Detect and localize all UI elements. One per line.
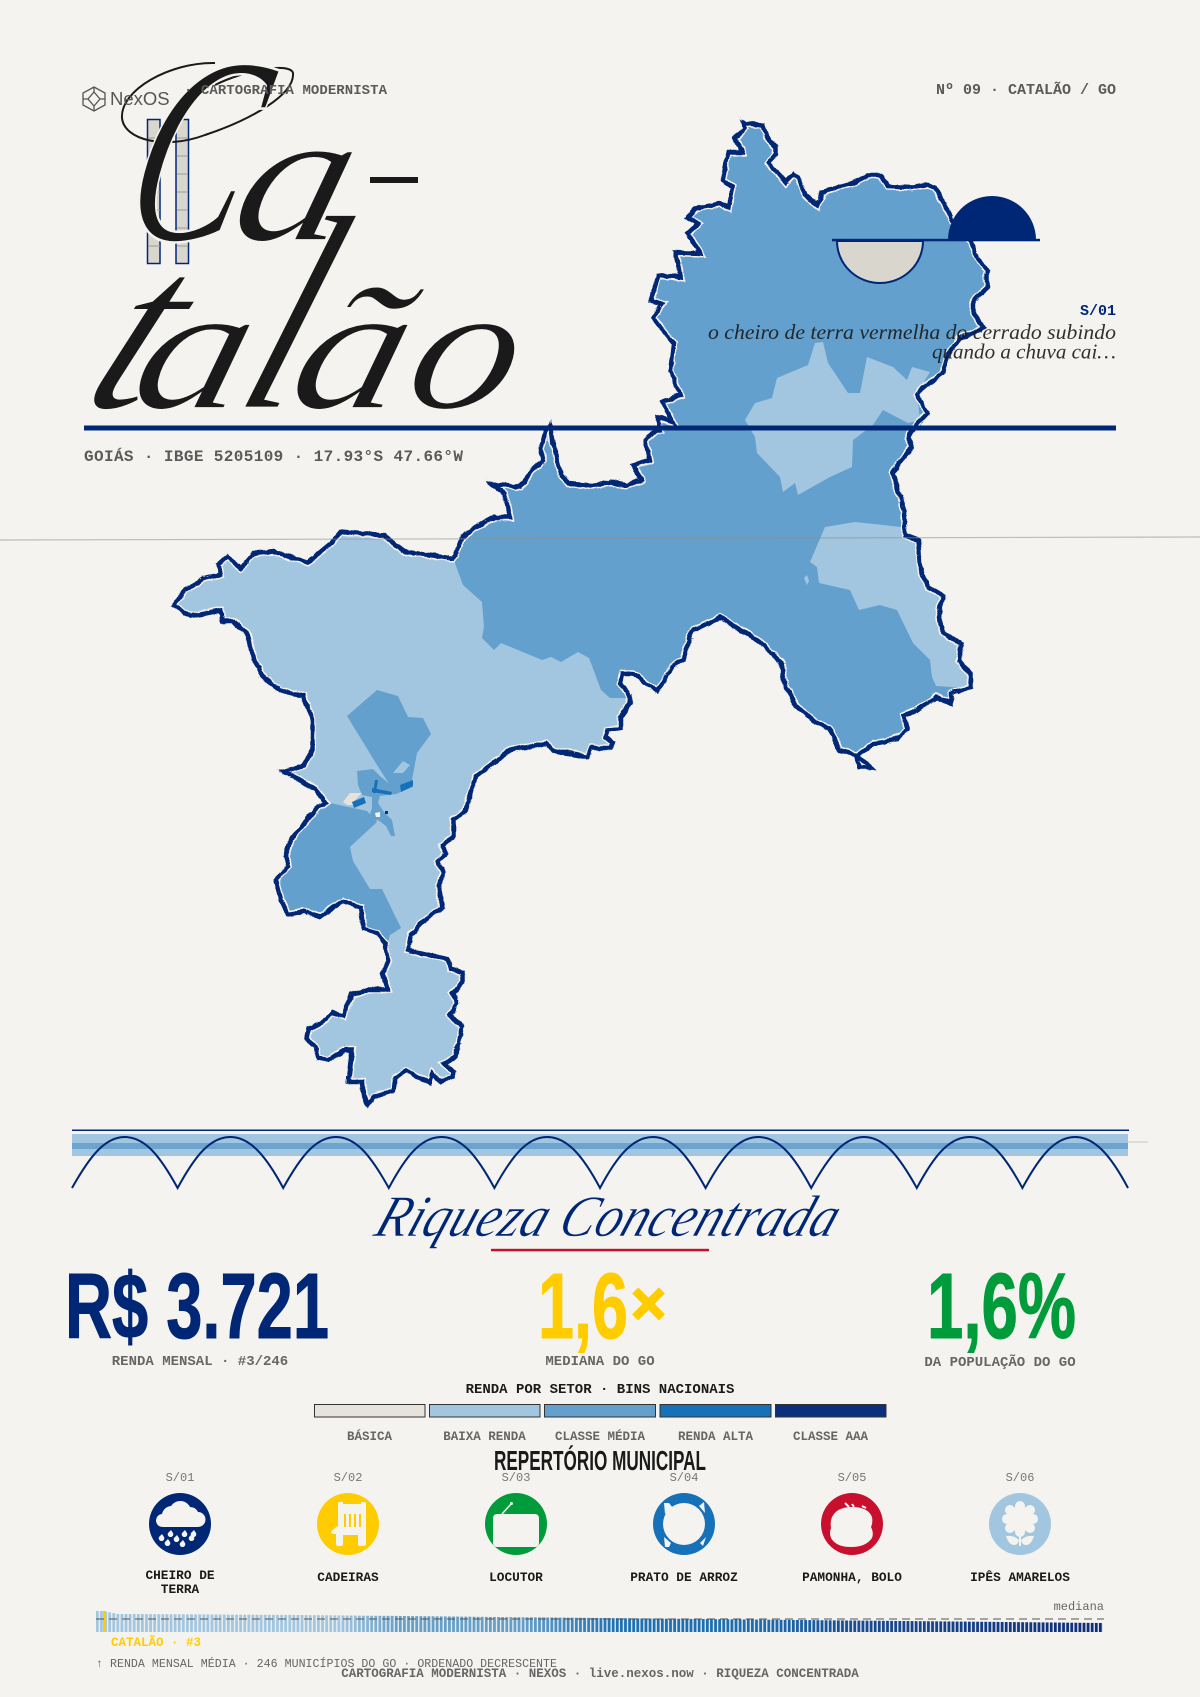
title: Ca-talão: a <box>116 247 279 447</box>
legend: renda por setor: RENDA ALTA <box>678 1430 754 1444</box>
sector: northeast mid income <box>454 127 984 752</box>
median label: mediana <box>1054 1600 1104 1614</box>
item: prato de arroz: S/04 <box>670 1471 698 1485</box>
icon: chair <box>331 1502 366 1546</box>
title: Ca-talão: C <box>101 2 298 298</box>
sense callout: S/01 <box>1080 303 1116 320</box>
location line: GOIÁS · IBGE 5205109 · 17.93°S 47.66°W <box>84 447 463 466</box>
item: cheiro de terra: CHEIRO DE <box>145 1568 215 1583</box>
ranking bar chart: 246 municipalities <box>96 1608 1104 1633</box>
legend: renda por setor: BÁSICA <box>347 1429 392 1444</box>
map of Catalão sectors <box>172 100 1000 1104</box>
item: locutor: LOCUTOR <box>489 1570 543 1585</box>
title: Ca-talão: ã <box>274 247 437 447</box>
sense callout <box>708 303 1116 364</box>
sector: central low income <box>745 342 930 495</box>
title rule <box>84 426 1116 430</box>
urban sector cluster <box>343 769 413 836</box>
stat: mediana: 1,6 <box>538 1254 628 1358</box>
sense callout: o cheiro de terra vermelha do cerrado subindo <box>708 320 1116 344</box>
Catalão rank label: CATALÃO · #3 <box>111 1635 201 1650</box>
chart caption: ↑ RENDA MENSAL MÉDIA · 246 MUNICÍPIOS DO GO · ORDENADO DECRESCENTE <box>96 1657 557 1671</box>
decorative gauge columns behind title <box>148 120 188 264</box>
stat: mediana: MEDIANA DO GO <box>545 1354 655 1370</box>
item: cheiro de terra: S/01 <box>166 1471 194 1485</box>
sector: eastern low income <box>810 522 968 688</box>
legend: renda por setor: BAIXA RENDA <box>443 1430 526 1444</box>
title: Ca-talão: l <box>210 161 382 469</box>
item: pamonha, bolo: S/05 <box>838 1471 866 1485</box>
Catalão marker bar <box>103 1611 106 1632</box>
header issue label: Nº 09 · CATALÃO / GO <box>936 81 1116 99</box>
legend: renda por setor: CLASSE MÉDIA <box>555 1429 646 1444</box>
sector: small spot <box>804 575 809 585</box>
icon: flower <box>1002 1501 1038 1546</box>
sector: north of town <box>347 690 431 790</box>
item: prato de arroz: PRATO DE ARROZ <box>630 1570 738 1585</box>
section heading: Riqueza Concentrada: Riqueza Concentrada <box>366 1184 851 1249</box>
stat: mediana: × <box>631 1270 666 1337</box>
title: Ca-talão: a <box>216 71 382 281</box>
legend: renda por setor: CLASSE AAA <box>793 1430 869 1444</box>
item: cheiro de terra <box>145 1471 215 1597</box>
brand logo: NexOS: NexOS <box>110 88 170 109</box>
title: Ca-talão <box>52 2 548 469</box>
icon: plate <box>663 1502 706 1547</box>
stat: população <box>924 1254 1076 1371</box>
item: locutor: S/03 <box>502 1471 530 1485</box>
title: Ca-talão: t <box>52 200 243 459</box>
item: pamonha, bolo: PAMONHA, BOLO <box>802 1570 902 1585</box>
wave band divider <box>72 1130 1148 1188</box>
item: cadeiras <box>317 1471 379 1585</box>
icon: radio <box>493 1502 539 1547</box>
item: ipês amarelos: S/06 <box>1006 1471 1034 1485</box>
heading: repertório municipal: REPERTÓRIO MUNICIPAL <box>494 1445 706 1476</box>
legend: renda por setor <box>314 1382 886 1444</box>
stat: renda mensal: RENDA MENSAL · #3/246 <box>112 1354 288 1370</box>
icon: cake <box>830 1503 873 1547</box>
item: ipês amarelos <box>970 1471 1070 1585</box>
item: prato de arroz <box>630 1471 738 1585</box>
median line <box>96 1618 1104 1620</box>
title: Ca-talão: o <box>390 248 548 447</box>
item: cadeiras: S/02 <box>334 1471 362 1485</box>
sector: southwest mid income <box>280 803 401 942</box>
sense callout: quando a chuva cai… <box>932 340 1116 364</box>
stat: renda mensal <box>65 1254 329 1370</box>
semicircle emblem <box>832 196 1040 283</box>
item: cadeiras: CADEIRAS <box>317 1570 379 1585</box>
icon: rain cloud <box>156 1501 206 1547</box>
legend: renda por setor: RENDA POR SETOR · BINS NACIONAIS <box>466 1382 734 1398</box>
sector: notch <box>393 761 410 773</box>
brand logo: NexOS <box>83 87 170 111</box>
item: cheiro de terra: TERRA <box>161 1582 200 1597</box>
header label: · CARTOGRAFIA MODERNISTA <box>184 83 388 99</box>
stat: população: 1,6% <box>927 1254 1076 1358</box>
footer: CARTOGRAFIA MODERNISTA · NEXOS · live.nexos.now · RIQUEZA CONCENTRADA <box>341 1667 859 1681</box>
stat: renda mensal: R$ 3.721 <box>65 1254 329 1358</box>
item: pamonha, bolo <box>802 1471 902 1585</box>
stat: população: DA POPULAÇÃO DO GO <box>924 1353 1076 1371</box>
item: ipês amarelos: IPÊS AMARELOS <box>970 1570 1070 1585</box>
item: locutor <box>485 1471 547 1585</box>
